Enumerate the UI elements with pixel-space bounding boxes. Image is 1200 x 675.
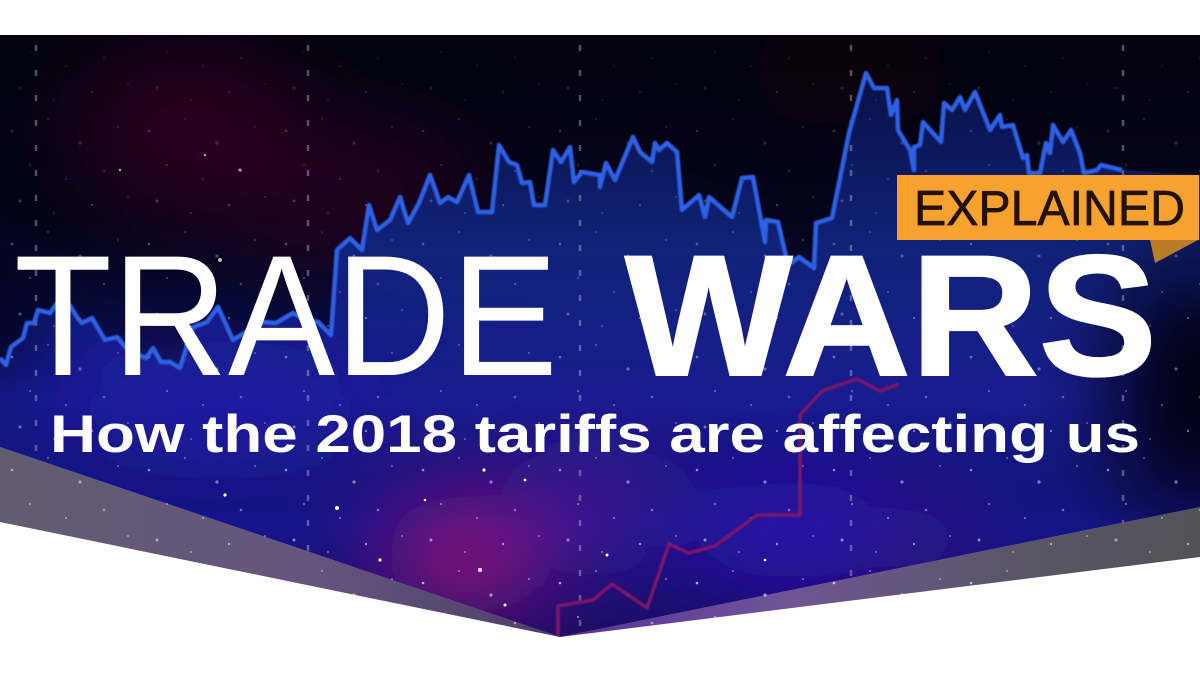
- callout: EXPLAINED ribbon: [897, 175, 1199, 263]
- blue stock chart area fill: [0, 73, 1200, 510]
- vertical dashed grid lines: [36, 45, 1123, 640]
- blue stock chart line: [0, 73, 1122, 368]
- colour nebula glows: [0, 240, 1200, 615]
- grey-purple lower wedges: [0, 447, 1200, 637]
- magenta stock chart line: [558, 379, 899, 636]
- title: WARS: WARS: [625, 220, 1157, 412]
- title: TRADE: TRADE: [14, 220, 558, 412]
- subtitle: How the 2018 tariffs are affecting us: [50, 405, 1140, 464]
- callout: EXPLAINED ribbon: EXPLAINED: [914, 182, 1185, 236]
